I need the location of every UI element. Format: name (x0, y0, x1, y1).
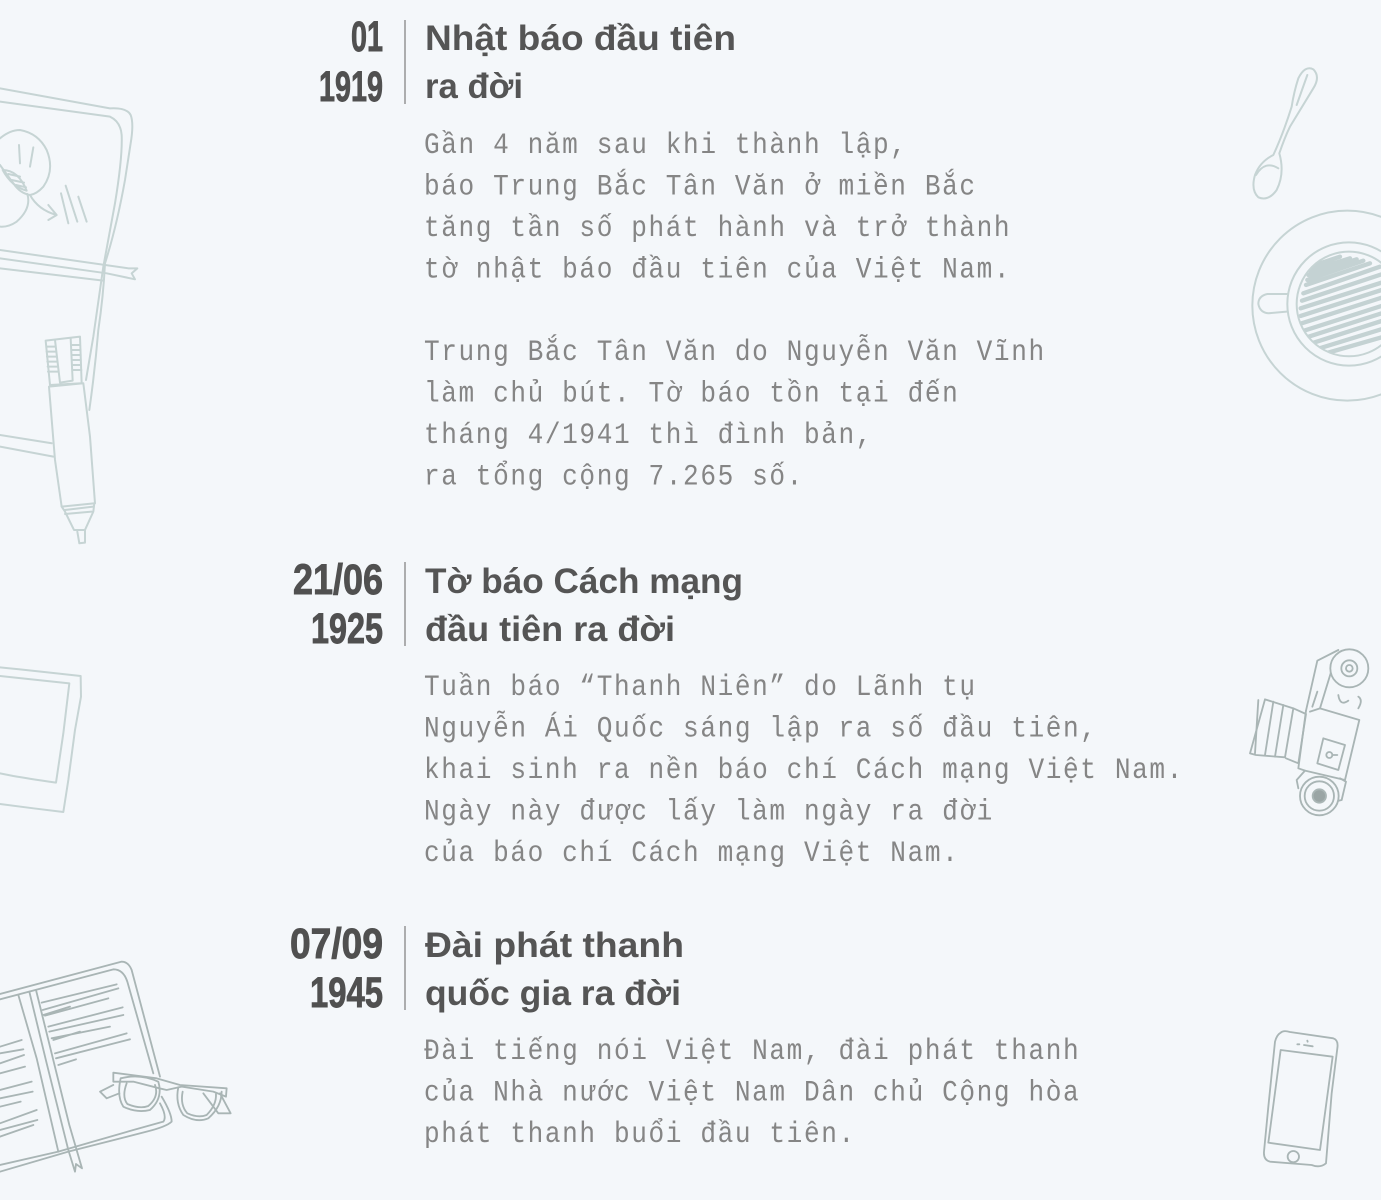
date: 21/06 1925: 21/06 (293, 556, 383, 604)
text block: 1945 body (424, 1036, 1080, 1152)
text block: 1919 body: tăng tần số phát hành và trở thành (424, 213, 1011, 246)
heading: Nhật báo đầu tiên ra đời: Nhật báo đầu tiên (425, 19, 736, 58)
heading: Đài phát thanh quốc gia ra đời: quốc gia ra đời (425, 974, 681, 1013)
timeline entry: 1919 (319, 13, 1046, 494)
icon: smartphone sketch (1264, 1031, 1338, 1166)
timeline entry: 1945 (290, 920, 1080, 1152)
date: 07/09 1945 (290, 920, 383, 1017)
icon: photo frame sketch (0, 667, 81, 812)
date: 01 1919: 1919 (319, 63, 383, 111)
text block: 1925 body: Nguyễn Ái Quốc sáng lập ra số đầu tiên, (424, 710, 1098, 746)
icon: glasses sketch (100, 1073, 231, 1120)
heading: Tờ báo Cách mạng đầu tiên ra đời: Tờ báo Cách mạng (425, 562, 743, 601)
heading: Tờ báo Cách mạng đầu tiên ra đời (425, 562, 743, 649)
date: 21/06 1925 (293, 556, 383, 653)
date: 07/09 1945: 07/09 (290, 920, 383, 968)
timeline entry: 1925 (293, 556, 1184, 871)
text block: 1945 body: Đài tiếng nói Việt Nam, đài phát thanh (424, 1036, 1080, 1069)
heading: Đài phát thanh quốc gia ra đời (425, 926, 684, 1013)
text block: 1919 body: tháng 4/1941 thì đình bản, (424, 420, 873, 453)
text block: 1925 body (424, 672, 1184, 871)
text block: 1919 body: tờ nhật báo đầu tiên của Việt Nam. (424, 254, 1011, 287)
icon: coffee cup sketch (1252, 211, 1381, 401)
text block: 1919 body: báo Trung Bắc Tân Văn ở miền Bắc (424, 168, 977, 204)
date: 21/06 1925: 1925 (311, 605, 383, 653)
heading: Nhật báo đầu tiên ra đời (425, 19, 736, 106)
text block: 1925 body: Tuần báo “Thanh Niên” do Lãnh tụ (424, 672, 977, 705)
text block: 1925 body: khai sinh ra nền báo chí Cách mạng Việt Nam. (424, 755, 1184, 788)
text block: 1925 body: Ngày này được lấy làm ngày ra đời (424, 796, 994, 829)
text block: 1919 body: Gần 4 năm sau khi thành lập, (424, 130, 908, 163)
text block: 1945 body: của Nhà nước Việt Nam Dân chủ Cộng hòa (424, 1077, 1080, 1110)
icon: spoon sketch (1253, 68, 1317, 198)
text block: 1919 body: Trung Bắc Tân Văn do Nguyễn Văn Vĩnh (424, 333, 1046, 370)
icon: marker pen sketch (46, 337, 95, 543)
text block: 1919 body: ra tổng cộng 7.265 số. (424, 460, 804, 494)
date: 01 1919: 01 (351, 13, 383, 61)
text block: 1919 body: làm chủ bút. Tờ báo tồn tại đến (424, 378, 959, 411)
heading: Tờ báo Cách mạng đầu tiên ra đời: đầu tiên ra đời (425, 610, 675, 649)
icon: open book sketch (0, 962, 172, 1172)
icon: camera sketch (1250, 649, 1368, 815)
heading: Nhật báo đầu tiên ra đời: ra đời (425, 67, 523, 106)
date: 07/09 1945: 1945 (310, 969, 383, 1017)
text block: 1919 body (424, 130, 1046, 494)
heading: Đài phát thanh quốc gia ra đời: Đài phát thanh (425, 926, 684, 965)
date: 01 1919 (319, 13, 383, 111)
text block: 1945 body: phát thanh buổi đầu tiên. (424, 1117, 856, 1152)
icon: notebook sketch (0, 88, 137, 457)
text block: 1925 body: của báo chí Cách mạng Việt Nam. (424, 838, 959, 871)
